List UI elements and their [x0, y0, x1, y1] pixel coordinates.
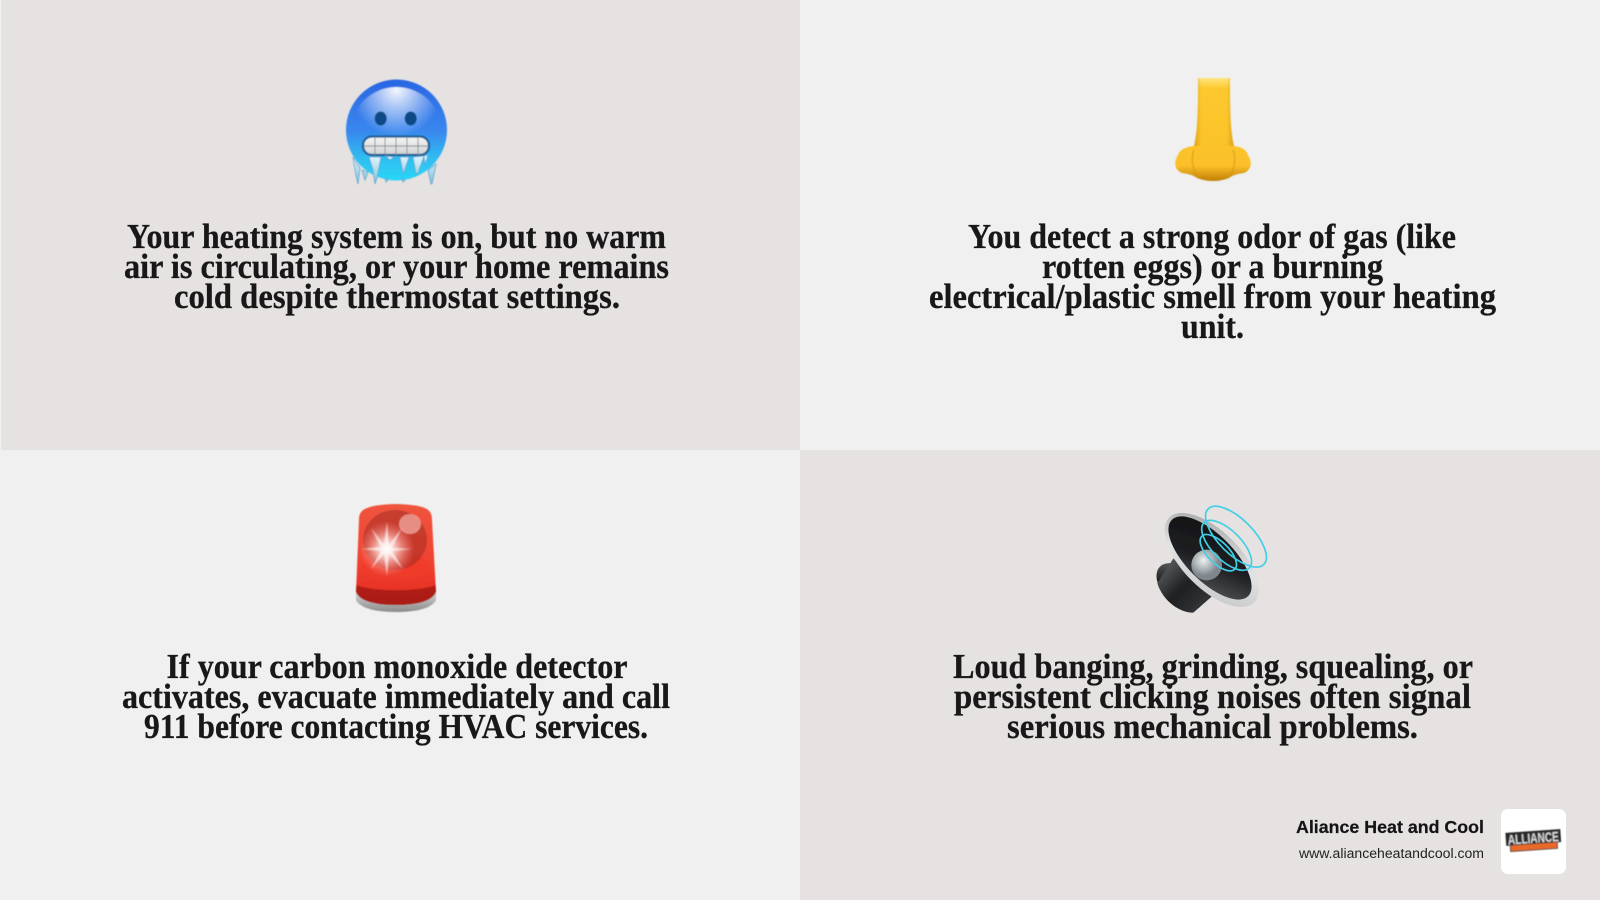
- text: odor: electrical/plastic smell from your heating: [929, 278, 1496, 316]
- icon: speaker: [1148, 497, 1276, 623]
- panel: noises: [800, 450, 1600, 900]
- text: carbon monoxide: [122, 648, 670, 746]
- text: no warm air: air is circulating, or your home remains: [124, 248, 669, 286]
- panel: odor: [800, 0, 1600, 450]
- footer: brand name and url: www.alianceheatandcool.com: [1298, 846, 1484, 861]
- text: carbon monoxide: activates, evacuate immediately and call: [122, 678, 670, 716]
- icon: cold face: [346, 80, 447, 184]
- panel: carbon monoxide: [1, 450, 800, 900]
- footer: brand name and url: Aliance Heat and Cool: [1296, 817, 1484, 837]
- text: odor: You detect a strong odor of gas (like: [968, 218, 1456, 256]
- logo card: ALLIANCE: [1507, 828, 1559, 848]
- logo card: [1501, 809, 1566, 874]
- text: odor: rotten eggs) or a burning: [1042, 248, 1383, 286]
- text: noises: persistent clicking noises often signal: [954, 678, 1471, 716]
- footer: brand name and url: [1296, 817, 1484, 861]
- text: no warm air: [124, 218, 669, 316]
- text: carbon monoxide: If your carbon monoxide detector: [166, 648, 628, 686]
- icon: siren: [356, 504, 436, 612]
- text: odor: unit.: [1181, 308, 1244, 346]
- text: noises: serious mechanical problems.: [1007, 708, 1418, 746]
- text: noises: Loud banging, grinding, squealing, or: [953, 648, 1473, 686]
- text: no warm air: Your heating system is on, but no warm: [127, 218, 666, 256]
- text: no warm air: cold despite thermostat settings.: [174, 278, 620, 316]
- icon: nose: [1175, 78, 1251, 181]
- text: carbon monoxide: 911 before contacting HVAC services.: [144, 708, 648, 746]
- panel: no warm air: [1, 0, 800, 450]
- text: noises: [953, 648, 1473, 746]
- text: odor: [929, 218, 1496, 346]
